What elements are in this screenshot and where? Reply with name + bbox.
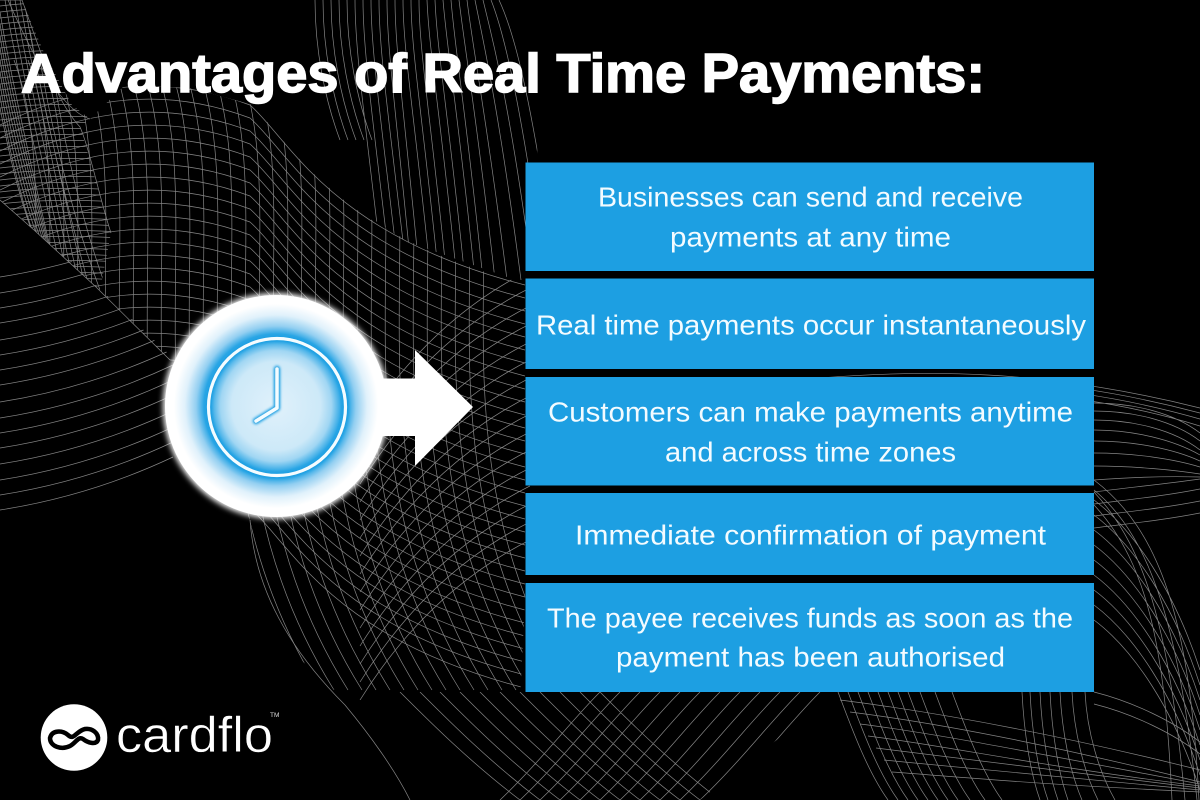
panel: advantage 1 <box>526 162 1094 271</box>
arrow <box>370 350 473 466</box>
panel: advantage 5: payment has been authorised <box>616 642 1005 672</box>
panel: advantage 3: and across time zones <box>665 436 956 468</box>
logo: cardflo: TM <box>270 712 279 719</box>
panel: advantage 5 <box>526 583 1094 692</box>
panel: advantage 1: Businesses can send and receive <box>598 182 1023 212</box>
panel: advantage 3: Customers can make payments anytime <box>548 396 1073 428</box>
panel: advantage 2: Real time payments occur instantaneously <box>536 310 1086 340</box>
title: Advantages of Real Time Payments: <box>21 42 985 104</box>
panel: advantage 3 <box>526 377 1094 486</box>
panel: advantage 4 <box>526 493 1094 575</box>
logo: cardflo: cardflo <box>116 707 273 763</box>
panel: advantage 5: The payee receives funds as soon as the <box>547 602 1073 634</box>
panel: advantage 1: payments at any time <box>670 222 951 252</box>
panel: advantage 4: Immediate confirmation of payment <box>575 520 1046 550</box>
icon: glowing clock <box>163 293 389 519</box>
logo: cardflo <box>41 704 279 771</box>
panel: advantage 2 <box>526 278 1094 369</box>
